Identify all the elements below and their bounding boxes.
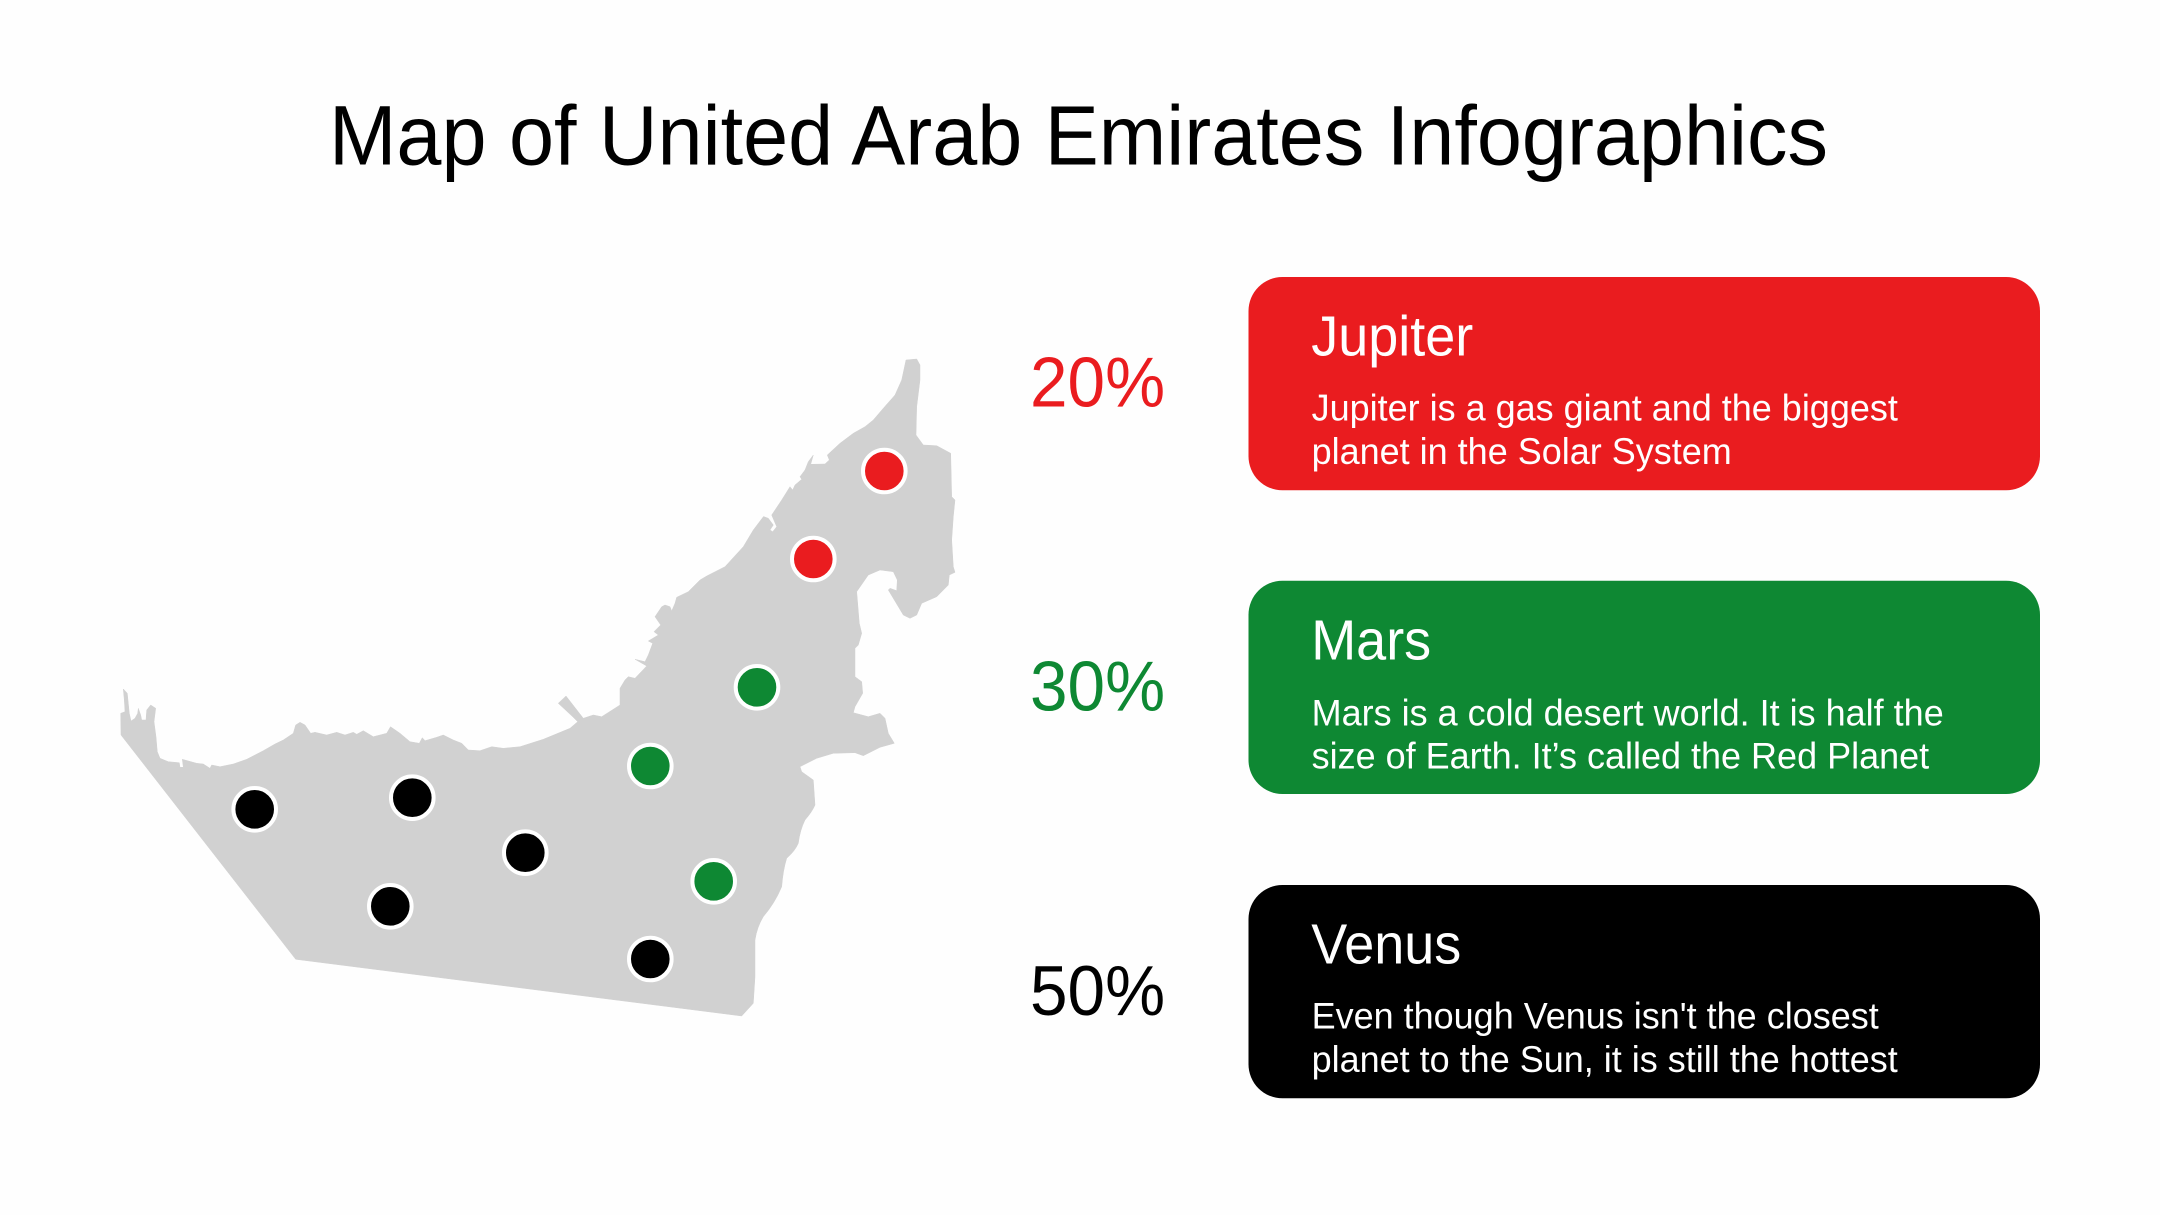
panel: Venus: Even though Venus isn't the closest — [1312, 995, 1879, 1037]
percentage: 20%: 20% — [1030, 343, 1165, 422]
title: Map of United Arab Emirates Infographics — [329, 88, 1828, 183]
panel: Venus: planet to the Sun, it is still the hottest — [1312, 1038, 1898, 1080]
marker: black — [233, 788, 276, 831]
panel: Jupiter: Jupiter is a gas giant and the biggest — [1312, 387, 1898, 429]
panel: Mars: size of Earth. It’s called the Red Planet — [1312, 735, 1929, 777]
marker: black — [504, 831, 547, 874]
panel: Jupiter: planet in the Solar System — [1312, 430, 1732, 472]
panel: Mars: Mars is a cold desert world. It is half the — [1312, 692, 1944, 733]
map silhouette — [121, 359, 955, 1016]
panel: Venus: Venus — [1311, 912, 1461, 976]
map of United Arab Emirates with markers — [121, 359, 955, 1016]
panel: Jupiter: Jupiter — [1311, 305, 1473, 368]
panel: Jupiter — [1248, 277, 2040, 490]
marker: red — [863, 450, 906, 492]
panel: Venus — [1248, 885, 2040, 1098]
percentage: 50%: 50% — [1030, 952, 1165, 1030]
marker: black — [391, 776, 434, 819]
marker: black — [369, 885, 412, 928]
marker: green — [736, 666, 778, 709]
panel: Mars: Mars — [1311, 608, 1431, 672]
marker: green — [629, 745, 672, 787]
marker: black — [629, 938, 672, 980]
marker: green — [692, 860, 735, 903]
panel: Mars — [1248, 581, 2040, 794]
marker: red — [792, 538, 835, 580]
percentage: 30%: 30% — [1030, 647, 1165, 726]
